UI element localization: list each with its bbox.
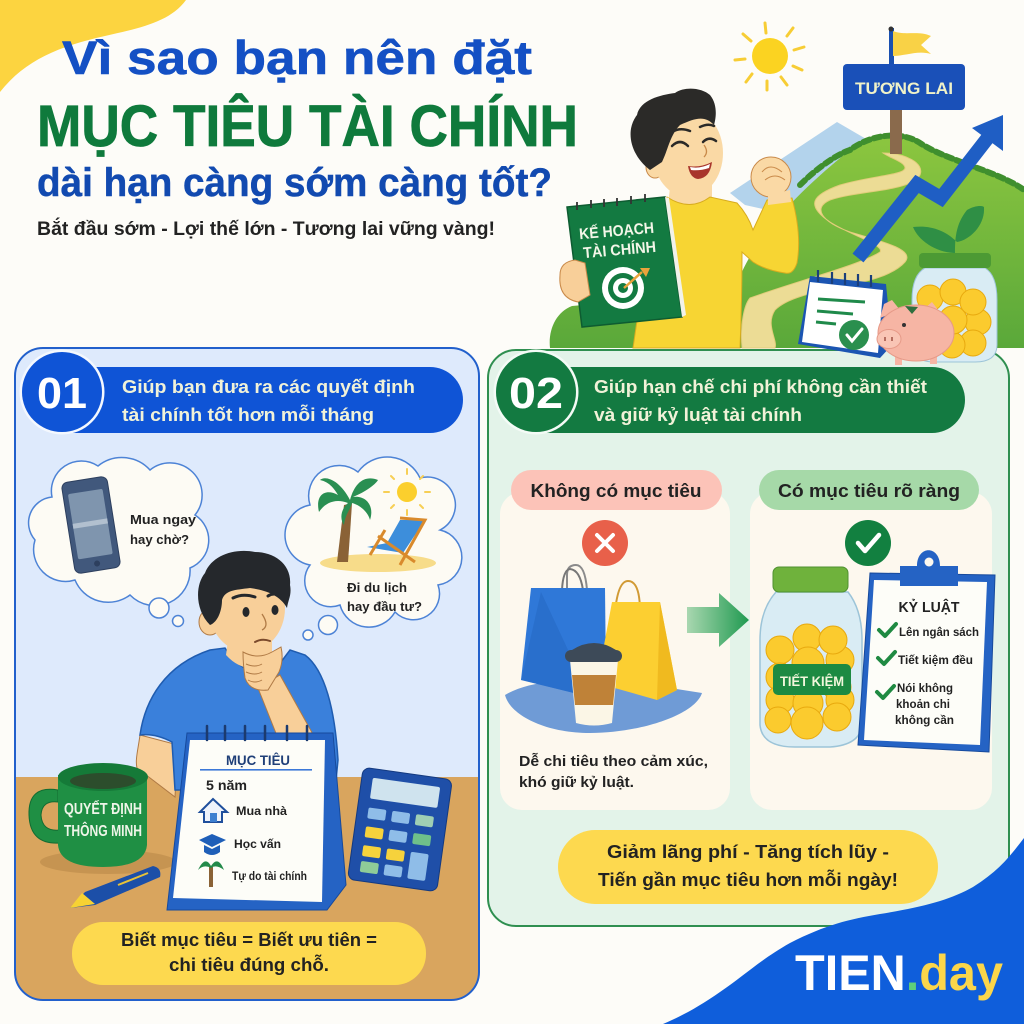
mug: Quyết định thông minh [29, 763, 176, 874]
header: 01: 01 [37, 369, 87, 418]
clipboard: Kỷ luật [858, 550, 995, 752]
callout: 02 [558, 830, 938, 904]
icon: cross [582, 520, 628, 566]
sub-panel: clear goal: Có mục tiêu rõ ràng [778, 480, 960, 501]
header: 01: tài chính tốt hơn mỗi tháng [122, 404, 374, 425]
mug: Quyết định thông minh: THÔNG MINH [64, 822, 142, 840]
coffee cup [565, 643, 622, 726]
sub-panel: clear goal [750, 470, 995, 810]
clipboard: Kỷ luật: Nói không [897, 681, 953, 695]
clipboard: Kỷ luật: Tiết kiệm đều [898, 653, 973, 667]
title: MỤC TIÊU TÀI CHÍNH [37, 94, 578, 159]
hero illustration background: hills and path [550, 122, 1024, 348]
calendar: Mục tiêu: Mua nhà [236, 804, 287, 818]
hero: notebook "Kế hoạch tài chính": TÀI CHÍNH [583, 239, 657, 262]
corner: blue wave with brand [663, 838, 1024, 1024]
sub-panel: no goal: Dễ chi tiêu theo cảm xúc, [519, 753, 708, 770]
hero: rising blue arrow [858, 115, 1003, 258]
arrow: from no goal to clear goal [687, 593, 749, 647]
mug: Quyết định thông minh: QUYẾT ĐỊNH [64, 801, 142, 818]
title [37, 31, 578, 205]
logo: TIEN.day: TIEN.day [795, 945, 1003, 1001]
thought bubble: beach: hay đầu tư? [347, 599, 422, 614]
calendar: Mục tiêu: MỤC TIÊU [226, 751, 290, 768]
yellow bag [597, 581, 677, 700]
header: 02 [494, 350, 965, 434]
clipboard: Kỷ luật: không cần [895, 713, 954, 727]
icon: beach chair [367, 518, 425, 565]
thought bubble: phone: hay chờ? [130, 532, 189, 547]
sub-panel: no goal: Không có mục tiêu [530, 480, 702, 501]
header: 01 [20, 350, 463, 434]
callout: 02: Tiến gần mục tiêu hơn mỗi ngày! [598, 869, 898, 890]
header: 02: Giúp hạn chế chi phí không cần thiết [594, 376, 927, 397]
icon: graduation cap [199, 834, 226, 855]
icon: check [845, 520, 891, 566]
hero: notebook "Kế hoạch tài chính": KẾ HOẠCH [579, 220, 655, 243]
callout: 01: chi tiêu đúng chỗ. [169, 954, 329, 975]
thought bubble: phone [29, 458, 209, 626]
thought bubble: beach [285, 457, 462, 640]
blue bag [521, 565, 606, 697]
callout: 01 [72, 922, 426, 985]
icon: sun small [384, 469, 430, 515]
subtitle: Bắt đầu sớm - Lợi thế lớn - Tương lai vững vàng! [37, 218, 495, 240]
calculator [348, 767, 452, 892]
icon: phone [61, 476, 121, 574]
hero: notebook "Kế hoạch tài chính" [560, 194, 686, 327]
sub-panel: no goal: khó giữ kỷ luật. [519, 774, 634, 791]
panel: 02 limit spending and keep discipline [488, 350, 1009, 926]
hero: signpost with flag: TƯƠNG LAI [855, 79, 953, 98]
calendar: Mục tiêu: Học vấn [234, 837, 281, 851]
hero: signpost with flag [843, 26, 965, 154]
thinking man in blue shirt [136, 551, 338, 797]
header: 02: và giữ kỷ luật tài chính [594, 404, 802, 425]
hero: small calendar with check [798, 270, 892, 358]
decorative corner: yellow blob [0, 0, 186, 92]
title: dài hạn càng sớm càng tốt? [37, 161, 552, 205]
hero: glass jar with coins and plant [912, 206, 997, 362]
jar of savings coins: TIẾT KIỆM [780, 672, 844, 689]
hero: happy man with raised fist [631, 89, 799, 348]
callout: 01: Biết mục tiêu = Biết ưu tiên = [121, 930, 377, 950]
calendar: Mục tiêu [167, 726, 346, 910]
clipboard: Kỷ luật: khoản chi [896, 697, 950, 711]
clipboard: Kỷ luật: KỶ LUẬT [898, 598, 960, 616]
table surface [15, 777, 479, 1000]
calendar: Mục tiêu: Tự do tài chính [232, 869, 307, 883]
thought bubble: phone: Mua ngay [130, 512, 197, 527]
clipboard: Kỷ luật: Lên ngân sách [899, 625, 979, 639]
icon: sun [735, 23, 804, 90]
pen [70, 866, 160, 908]
title: Vì sao bạn nên đặt [62, 31, 532, 84]
shopping bags and coffee [505, 565, 702, 733]
hero: piggy bank [877, 300, 954, 365]
header: 01: Giúp bạn đưa ra các quyết định [122, 376, 415, 397]
header: 02: 02 [509, 369, 563, 418]
jar of savings coins [760, 567, 862, 747]
callout: 02: Giảm lãng phí - Tăng tích lũy - [607, 841, 889, 862]
panel: 01 better monthly decisions [15, 348, 479, 1000]
thought bubble: beach: Đi du lịch [347, 580, 407, 595]
icon: house [200, 799, 227, 822]
icon: palm tree [318, 478, 378, 562]
icon: small palm [198, 861, 224, 887]
sub-panel: no goal [500, 470, 730, 810]
icon: target with dart [602, 267, 650, 309]
calendar: Mục tiêu: 5 năm [206, 777, 247, 793]
